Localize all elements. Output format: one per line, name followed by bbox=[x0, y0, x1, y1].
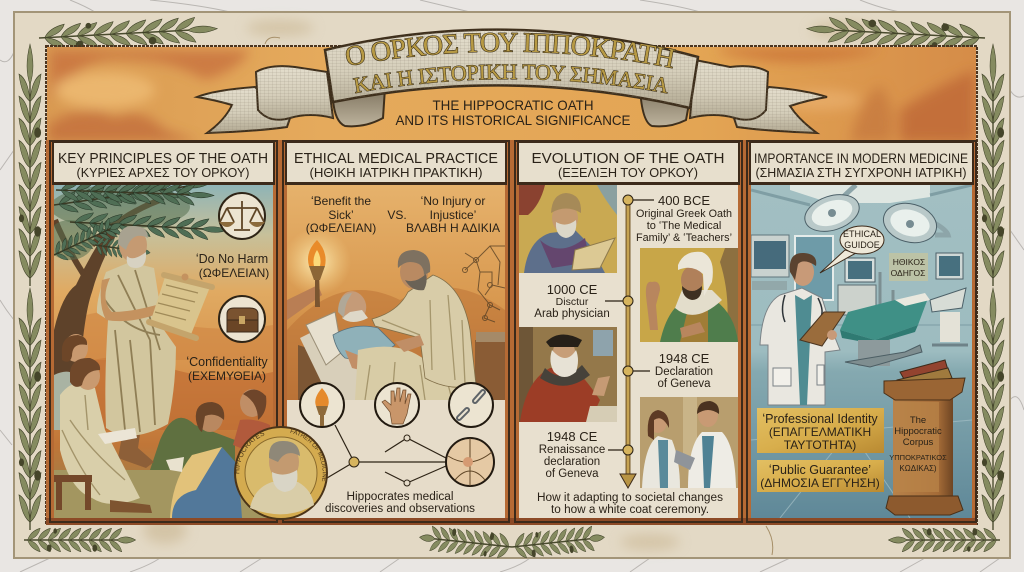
olive garland: bottom center left bbox=[418, 525, 513, 559]
icon: torch bbox=[300, 383, 344, 427]
milestone: 1948 CE renaissance: declaration bbox=[544, 456, 600, 468]
milestone: 1948 CE declaration bbox=[655, 351, 713, 390]
panel: importance in modern medicine bbox=[749, 142, 974, 518]
milestone: 400 BCE bbox=[636, 193, 732, 244]
portrait: renaissance physician bbox=[519, 327, 617, 422]
milestone: 1948 CE renaissance: Renaissance bbox=[539, 444, 605, 456]
panel 2 title strip: (ΗΘΙΚΗ ΙΑΤΡΙΚΗ ΠΡΑΚΤΙΚΗ) bbox=[310, 166, 482, 180]
olive garland: left bbox=[19, 44, 41, 286]
milestone: 1000 CE: Arab physician bbox=[534, 308, 610, 320]
panel: evolution of the oath bbox=[517, 142, 740, 518]
heading texts for benefit vs injury: ΒΛΑΒΗ Η ΑΔΙΚΙΑ bbox=[406, 221, 500, 235]
portrait: modern doctors bbox=[640, 397, 738, 488]
panel 3 title strip: (ΕΞΕΛΙΞΗ ΤΟΥ ΟΡΚΟΥ) bbox=[558, 166, 698, 180]
ribbon right tail bbox=[734, 87, 827, 133]
standing teacher bbox=[97, 226, 212, 468]
subtitle: AND ITS HISTORICAL SIGNIFICANCE bbox=[396, 112, 630, 128]
ribbon left tail bbox=[197, 87, 290, 133]
panel: ethical medical practice bbox=[283, 142, 507, 518]
caption: medical discoveries: discoveries and observations bbox=[325, 503, 475, 515]
olive garland: right bbox=[982, 44, 1004, 286]
illustration: teacher under olive tree with students bbox=[46, 173, 273, 518]
greek label: ethical guide: ΟΔΗΓΟΣ bbox=[891, 268, 925, 278]
subtitle: THE HIPPOCRATIC OATH bbox=[432, 97, 594, 113]
ribbon right curl bbox=[690, 60, 768, 120]
seated students right bbox=[166, 389, 270, 518]
panel 3 title strip bbox=[517, 142, 740, 185]
operating table bbox=[840, 293, 930, 367]
heading texts for benefit vs injury: (ΩΦΕΛΕΙΑΝ) bbox=[306, 221, 376, 235]
outer bronze frame around panels bbox=[46, 46, 977, 525]
medallion inscription left: HIPPOCRATES bbox=[236, 432, 264, 474]
doctor in white coat bbox=[760, 253, 845, 405]
panel 2 title strip bbox=[285, 142, 507, 185]
caption: adapting to societal changes: How it adapting to societal changes bbox=[537, 492, 723, 504]
milestone: 400 BCE: 400 BCE bbox=[658, 193, 710, 208]
olive garland: bottom center right bbox=[511, 525, 606, 559]
medallion inscription right: FATHER OF MEDICINE bbox=[290, 429, 326, 482]
medical equipment bbox=[838, 253, 968, 345]
arm holding torch bbox=[287, 240, 326, 320]
heading texts for benefit vs injury: ʻNo Injury or bbox=[421, 194, 485, 208]
illustration: physician tending a patient bbox=[283, 185, 505, 400]
text: confidentiality: ʻConfidentiality bbox=[186, 355, 268, 369]
lower parchment area bbox=[287, 400, 505, 518]
label: professional identity: ʻProfessional Identity bbox=[762, 412, 878, 426]
heading texts for benefit vs injury bbox=[306, 194, 500, 235]
panel 1 title strip: (ΚΥΡΙΕΣ ΑΡΧΕΣ ΤΟΥ ΟΡΚΟΥ) bbox=[76, 166, 250, 180]
door bbox=[795, 236, 833, 300]
callout bubble: ETHICAL bbox=[843, 229, 881, 239]
heading texts for benefit vs injury: ʻBenefit the bbox=[311, 194, 371, 208]
panel 3 title strip: EVOLUTION OF THE OATH bbox=[532, 151, 724, 167]
network sketch bbox=[462, 246, 505, 322]
label: public guarantee bbox=[757, 460, 884, 492]
milestone: 1000 CE: 1000 CE bbox=[547, 282, 598, 297]
panel 4 title strip: IMPORTANCE IN MODERN MEDICINE bbox=[754, 151, 968, 166]
ribbon right fold bbox=[640, 88, 690, 126]
olive garland: right lower bbox=[982, 288, 1004, 530]
text: do no harm: (ΩΦΕΛΕΙΑΝ) bbox=[199, 266, 269, 280]
label: professional identity: (ΕΠΑΓΓΕΛΜΑΤΙΚΗ bbox=[769, 425, 871, 439]
lectern with books bbox=[884, 360, 965, 515]
bed and patient bbox=[298, 287, 505, 400]
surgical lamps bbox=[800, 185, 948, 248]
icon: broken chain bbox=[449, 383, 493, 427]
portrait: arab physician bbox=[640, 248, 738, 342]
olive garland: bottom left bbox=[24, 528, 136, 552]
milestone: 400 BCE: Family’ & ʻTeachers’ bbox=[636, 232, 732, 244]
callout bubble bbox=[820, 226, 884, 273]
label: professional identity bbox=[757, 408, 884, 453]
ribbon left curl bbox=[256, 66, 333, 120]
panel 1 title strip bbox=[52, 142, 275, 185]
milestone: 1948 CE renaissance: of Geneva bbox=[545, 468, 599, 480]
text: confidentiality: (ΕΧΕΜΥΘΕΙΑ) bbox=[188, 369, 266, 383]
olive garland: bottom right bbox=[888, 528, 1000, 552]
text: do no harm: ʻDo No Harm bbox=[196, 252, 268, 266]
callout bubble: GUIDOE bbox=[844, 240, 880, 250]
panel 4 title strip: (ΣΗΜΑΣΙΑ ΣΤΗ ΣΥΓΧΡΟΝΗ ΙΑΤΡΙΚΗ) bbox=[756, 166, 966, 180]
illustration: operating room bbox=[751, 185, 972, 518]
wall screen bbox=[751, 235, 789, 290]
icon: open hand bbox=[375, 383, 419, 427]
caption: medical discoveries bbox=[325, 491, 475, 515]
caption: adapting to societal changes: to how a white coat ceremony. bbox=[551, 504, 709, 516]
milestone: 1948 CE declaration: of Geneva bbox=[657, 378, 711, 390]
panel 2 title strip: ETHICAL MEDICAL PRACTICE bbox=[294, 151, 498, 167]
milestone: 1000 CE: Disctur bbox=[556, 296, 589, 308]
panel 4 title strip bbox=[749, 142, 974, 185]
lectern with books: Hippocratic bbox=[894, 426, 942, 437]
label: public guarantee: ʻPublic Guarantee’ bbox=[769, 463, 871, 477]
milestone: 1000 CE bbox=[534, 282, 610, 320]
milestone: 400 BCE: Original Greek Oath bbox=[636, 208, 732, 220]
header sky background bbox=[45, 45, 978, 142]
milestone: 1948 CE declaration: Declaration bbox=[655, 366, 713, 378]
timeline arrow bbox=[605, 195, 654, 488]
label: public guarantee: (ΔΗΜΟΣΙΑ ΕΓΓΥΗΣΗ) bbox=[760, 476, 880, 490]
caption: adapting to societal changes bbox=[537, 492, 723, 516]
panel 1 title strip: KEY PRINCIPLES OF THE OATH bbox=[58, 151, 268, 167]
milestone: 1948 CE renaissance: 1948 CE bbox=[547, 429, 598, 444]
greek label: ethical guide bbox=[889, 253, 928, 281]
diagram links bbox=[327, 425, 446, 483]
greek label: ethical guide: ΗΘΙΚΟΣ bbox=[893, 257, 925, 267]
lectern with books: ΥΠΠΟΚΡΑΤΙΚΟΣ bbox=[889, 453, 947, 462]
panel: key principles bbox=[46, 142, 275, 518]
portrait: greek physician bbox=[519, 185, 617, 273]
gold medallion of Hippocrates bbox=[234, 426, 328, 520]
milestone: 1948 CE declaration: 1948 CE bbox=[659, 351, 710, 366]
seated students left bbox=[54, 334, 152, 513]
ribbon left fold bbox=[333, 88, 385, 126]
physician bbox=[372, 250, 476, 387]
lectern with books: ΚΩΔΙΚΑΣ) bbox=[899, 464, 937, 473]
title greek line 1: Ο ΟΡΚΟΣ ΤΟΥ ΙΠΠΟΚΡΑΤΗ bbox=[346, 32, 676, 69]
title greek line 2: ΚΑΙ Η ΙΣΤΟΡΙΚΗ ΤΟΥ ΣΗΜΑΣΙΑ bbox=[352, 64, 668, 94]
ribbon centre bbox=[325, 30, 698, 108]
lectern with books: The bbox=[910, 415, 926, 426]
icon: treasure chest bbox=[219, 296, 265, 342]
scroll bbox=[149, 274, 212, 338]
caption: medical discoveries: Hippocrates medical bbox=[346, 491, 454, 503]
icon: scales of justice bbox=[219, 193, 265, 239]
olive garland: top right bbox=[806, 16, 986, 50]
heading texts for benefit vs injury: Injustice’ bbox=[430, 208, 476, 222]
text: confidentiality bbox=[186, 355, 268, 383]
header ribbon banner bbox=[193, 28, 828, 134]
label: professional identity: ΤΑΥΤΟΤΗΤΑ) bbox=[784, 438, 856, 452]
heading texts for benefit vs injury: Sick’ bbox=[328, 208, 354, 222]
milestone: 1948 CE renaissance bbox=[539, 429, 605, 480]
text: do no harm bbox=[196, 252, 269, 280]
olive garland: top left bbox=[38, 16, 218, 50]
lectern with books: Corpus bbox=[903, 437, 934, 448]
heading texts for benefit vs injury: VS. bbox=[387, 208, 407, 222]
milestone: 400 BCE: to ʻThe Medical bbox=[647, 220, 721, 232]
icon: anatomy circle bbox=[446, 438, 494, 486]
olive garland: left lower bbox=[19, 288, 41, 530]
subtitle bbox=[396, 97, 630, 128]
